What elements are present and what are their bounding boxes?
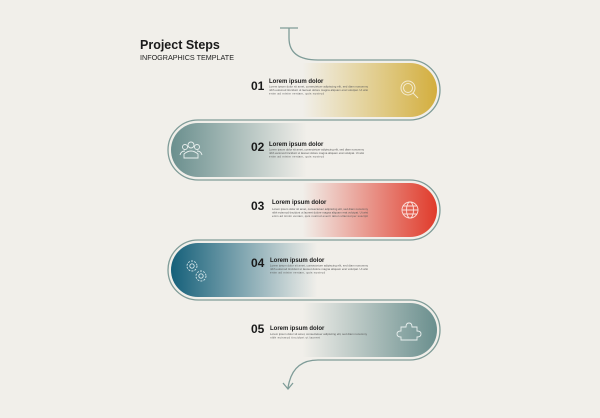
serpentine path [168, 28, 440, 388]
icon: gears [187, 261, 206, 281]
step 04: nibh euismod tincidunt ut laoreet dolore magna aliquam erat volutpat. Ut wisi [270, 267, 368, 271]
step 03: Lorem ipsum dolor [272, 200, 327, 206]
step 02: Lorem ipsum dolor [269, 142, 324, 148]
title: INFOGRAPHICS TEMPLATE [140, 53, 234, 62]
title: Project Steps [140, 38, 220, 52]
step 02: 02 [251, 140, 265, 154]
icon: team [180, 142, 202, 158]
step 01 [251, 79, 369, 96]
step 01: enim ad minim veniam, quis nostrud [269, 92, 324, 96]
arrow head [283, 383, 293, 389]
step 05: 05 [251, 322, 265, 336]
step 02 [251, 140, 365, 158]
title [140, 38, 234, 62]
step 03: 03 [251, 199, 265, 213]
step 02: nibh euismod tincidunt ut laoreet dolore magna aliquam erat volutpat. Ut wisi [269, 151, 364, 155]
step 03 [251, 199, 369, 218]
step 01: Lorem ipsum dolor [269, 79, 324, 85]
step 03: Lorem ipsum dolor sit amet, consectetuer adipiscing elit, sed diam nonummy [272, 207, 369, 211]
step 02: enim ad minim veniam, quis nostrud [269, 154, 324, 158]
icon: puzzle [397, 323, 421, 340]
step 05: nibh euismod tincidunt ut laoreet [270, 336, 320, 340]
step 05: Lorem ipsum dolor sit amet, consectetuer adipiscing elit, sed diam nonummy [270, 332, 368, 336]
step 04: Lorem ipsum dolor [270, 258, 325, 264]
step 01: Lorem ipsum dolor sit amet, consectetuer adipiscing elit, sed diam nonummy [269, 84, 369, 88]
step 04: Lorem ipsum dolor sit amet, consectetuer adipiscing elit, sed diam nonummy [270, 264, 369, 268]
step 03: enim ad minim veniam, quis nostrud exerci tation ullamcorper suscipit [272, 214, 368, 218]
icon: magnifier [401, 81, 418, 98]
step 04 [251, 256, 369, 274]
step 05: Lorem ipsum dolor [270, 326, 325, 332]
icon: globe [402, 202, 418, 218]
pill fills [171, 63, 437, 357]
step 01: 01 [251, 79, 265, 93]
step 04: 04 [251, 256, 265, 270]
step 02: Lorem ipsum dolor sit amet, consectetuer adipiscing elit, sed diam nonummy [269, 148, 365, 152]
step 03: nibh euismod tincidunt ut laoreet dolore magna aliquam erat volutpat. Ut wisi [272, 210, 368, 214]
step 01: nibh euismod tincidunt ut laoreet dolore magna aliquam erat volutpat. Ut wisi [269, 88, 368, 92]
step 05 [251, 322, 368, 340]
step 04: enim ad minim veniam, quis nostrud [270, 270, 325, 274]
